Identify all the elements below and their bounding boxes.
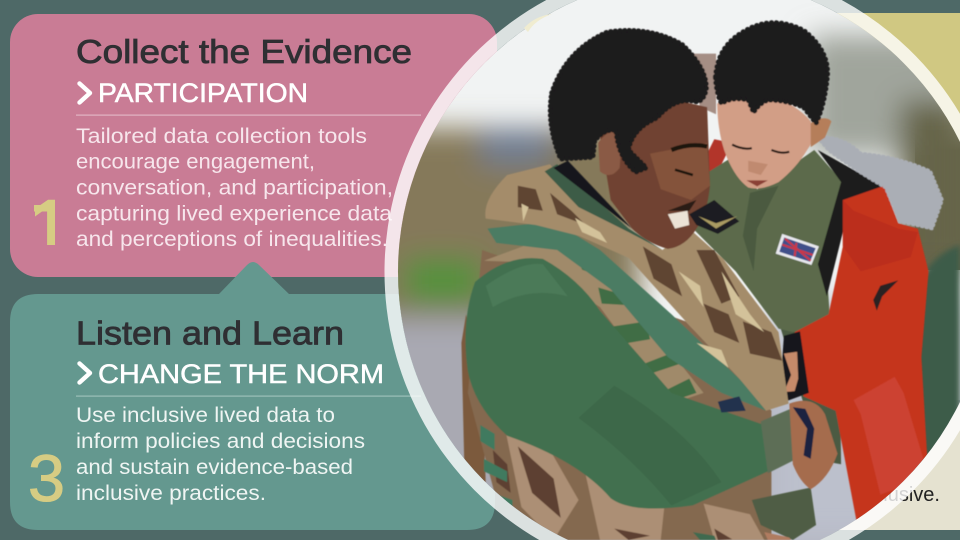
lower camo vest (480, 421, 764, 540)
panel: yellow step (mostly hidden) (700, 13, 960, 273)
faint yellow glint on ring (524, 14, 552, 32)
man's jacket sleeve (465, 258, 768, 509)
camo collar (485, 164, 789, 411)
child's hand (784, 352, 798, 392)
child's leg (764, 532, 791, 540)
pilot wings badge (689, 200, 739, 234)
photo subjects (461, 23, 942, 540)
strip under collar (487, 221, 766, 411)
watch band (793, 407, 814, 459)
red coat (795, 186, 929, 534)
body text: inclusive practices. (76, 482, 266, 505)
man's hair (550, 31, 706, 172)
person behind (694, 53, 717, 114)
body text: capturing lived experience data (76, 202, 392, 226)
body text: inform policies and decisions (76, 430, 365, 453)
body text: encourage engagement, (76, 150, 315, 174)
photo ring (384, 0, 960, 540)
child's cuff (782, 331, 809, 401)
panel: beige step (mostly hidden) (700, 270, 960, 530)
cuff (760, 408, 794, 473)
heading: listen and learn: Listen and Learn (76, 314, 344, 352)
body text (76, 125, 393, 251)
icon: chevron (80, 364, 90, 382)
man's face (600, 100, 710, 249)
child's ear (811, 118, 831, 147)
child olive jacket (686, 150, 843, 332)
body text (76, 404, 365, 505)
photo backdrop (340, 0, 960, 540)
child's hair (715, 23, 828, 123)
text: inclusive fragment: inclusive. (858, 484, 940, 506)
union flag patch (776, 234, 819, 265)
number 3: 3 (28, 441, 65, 515)
icon: chevron (80, 84, 90, 102)
body text: Use inclusive lived data to (76, 404, 335, 427)
man's ear (598, 132, 622, 175)
man's hand (789, 401, 837, 489)
side strap (461, 314, 486, 482)
black fleece lining (818, 150, 882, 296)
child lower jacket and sleeve (779, 314, 841, 464)
child's face (717, 94, 814, 189)
man's collar neck (545, 164, 662, 250)
photo: father in military uniform holding child (340, 0, 960, 540)
number 1: 1 (28, 183, 71, 271)
body text: and perceptions of inequalities. (76, 228, 388, 251)
child lower legs (752, 487, 816, 540)
divider (76, 396, 421, 397)
red hood behind child (708, 138, 727, 172)
number 1 (34, 200, 55, 245)
body text: Tailored data collection tools (76, 125, 367, 148)
blue device (718, 396, 746, 412)
fur trim (818, 137, 942, 229)
panel: step 1 collect the evidence (10, 14, 497, 277)
body text: conversation, and participation, (76, 176, 393, 200)
vest shoulder (484, 243, 704, 404)
divider (76, 114, 421, 116)
body text: and sustain evidence-based (76, 456, 353, 479)
subheading: participation: PARTICIPATION (98, 78, 308, 108)
panel: step 3 listen and learn (10, 262, 495, 530)
heading: collect the evidence: Collect the Evidence (76, 33, 412, 70)
torso base (468, 250, 771, 540)
subheading: change the norm: CHANGE THE NORM (98, 359, 384, 389)
